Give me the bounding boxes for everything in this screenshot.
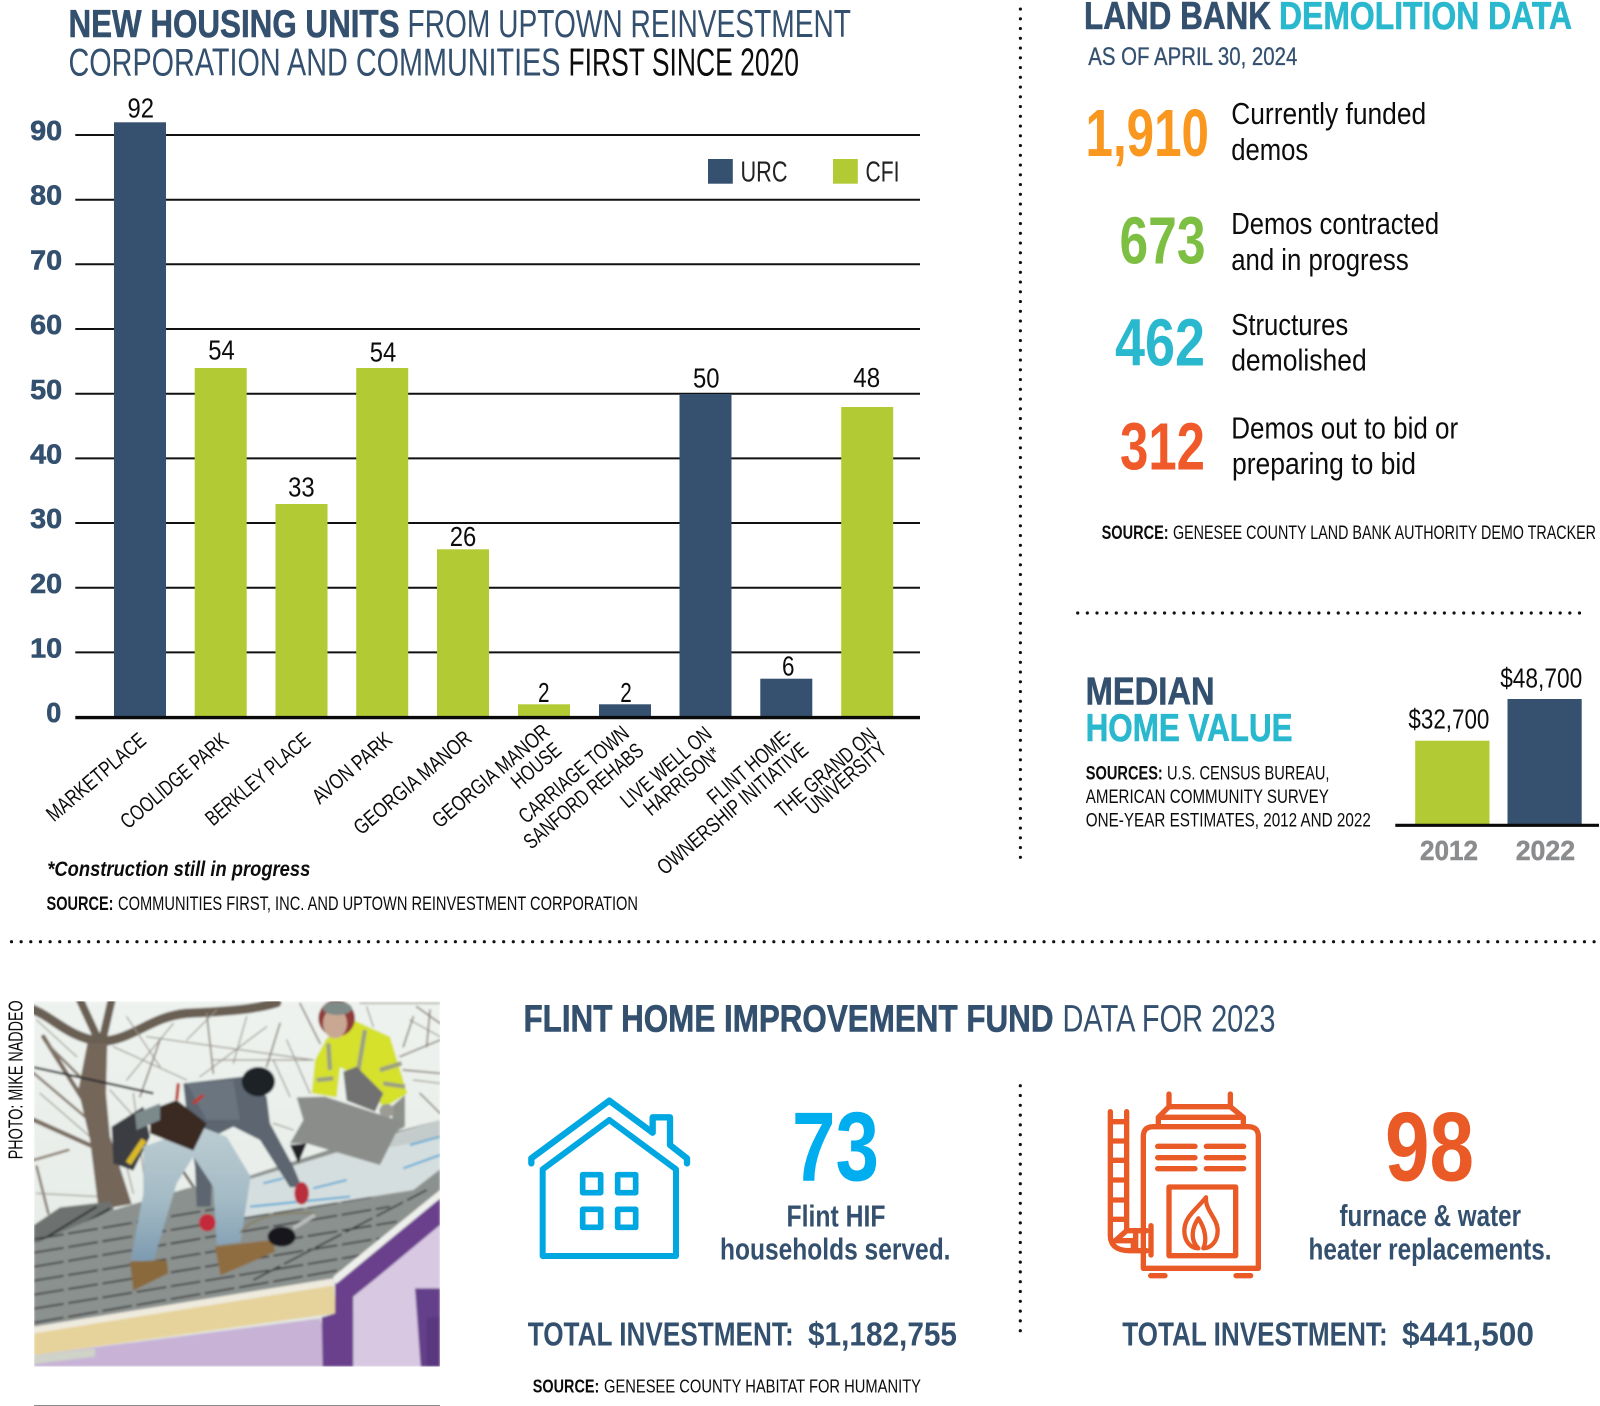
stat: 312 demos out to bid: preparing to bid — [1232, 446, 1416, 481]
bar value labels: 54 — [208, 335, 235, 366]
stat: 312 demos out to bid — [1120, 410, 1458, 485]
stat: 98 furnace and water heater replacements: furnace & water — [1340, 1198, 1521, 1233]
bar value labels: 50 — [693, 362, 720, 393]
bar chart: median value — [1395, 662, 1599, 866]
sources text: U.S. CENSUS BUREAU, — [1167, 764, 1330, 784]
y axis labels: 40 — [30, 438, 62, 469]
stat: 1,910 currently funded demos: 1,910 — [1086, 96, 1209, 171]
category labels: GEORGIA MANOR — [349, 726, 476, 840]
bar value labels — [128, 92, 880, 708]
stat: 462 structures demolished: demolished — [1231, 342, 1367, 377]
y axis labels: 0 — [46, 697, 61, 728]
sources text — [1086, 764, 1371, 832]
footnote: *Construction still in progress — [47, 858, 310, 881]
sources text: SOURCES: — [1086, 764, 1163, 784]
y axis labels: 70 — [30, 244, 62, 275]
category labels: BERKLEY PLACE — [201, 728, 315, 831]
photo: roofers working on a house — [30, 1000, 440, 1367]
total investment: 441,500: TOTAL INVESTMENT: — [1122, 1316, 1388, 1353]
heading: median home value: MEDIAN — [1086, 670, 1215, 714]
y axis labels: 80 — [30, 180, 62, 211]
total investment: 1,182,755: $1,182,755 — [808, 1316, 957, 1353]
next photo edge — [34, 1405, 440, 1406]
heading: median home value — [1086, 670, 1293, 750]
stat: 673 demos contracted: Demos contracted — [1231, 206, 1439, 241]
source line: SOURCE: — [1102, 522, 1169, 544]
title: new housing units — [68, 3, 851, 85]
category labels: GEORGIA MANOR — [427, 719, 554, 833]
bar value labels: 6 — [782, 650, 794, 682]
icon: house — [531, 1101, 687, 1256]
y axis labels: 90 — [30, 115, 62, 146]
bar value labels: 2 — [620, 677, 632, 708]
category labels: HOUSE — [506, 738, 566, 794]
source line: SOURCE: — [46, 893, 114, 915]
chart grid lines — [75, 135, 920, 652]
heading: median home value: HOME VALUE — [1086, 707, 1293, 750]
panel: median home value — [1086, 662, 1599, 866]
photo credit: PHOTO: MIKE NADDEO — [6, 1000, 28, 1159]
category labels: SANFORD REHABS — [519, 738, 648, 854]
source line — [46, 893, 638, 915]
category labels: CARRIAGE TOWN — [514, 721, 634, 828]
sources text: ONE-YEAR ESTIMATES, 2012 AND 2022 — [1086, 810, 1371, 832]
heading: land bank demolition data — [1084, 0, 1572, 38]
heading: flint home improvement fund: DATA FOR 2023 — [1062, 999, 1276, 1041]
total investment: 1,182,755: TOTAL INVESTMENT: — [528, 1316, 794, 1353]
panel: flint home improvement fund — [524, 999, 1552, 1397]
bar chart: median value: $32,700 — [1408, 703, 1489, 734]
y axis labels: 30 — [30, 503, 62, 534]
stat: 462 structures demolished: Structures — [1231, 307, 1348, 342]
stat: 1,910 currently funded demos: Currently funded — [1231, 96, 1426, 131]
legend — [708, 157, 900, 189]
sources text: AMERICAN COMMUNITY SURVEY — [1086, 787, 1329, 808]
legend: URC — [740, 157, 788, 189]
category labels: COOLIDGE PARK — [116, 728, 234, 834]
y axis labels: 60 — [30, 309, 62, 340]
category labels: OWNERSHIP INITIATIVE — [652, 738, 813, 880]
bar chart bars — [114, 122, 893, 718]
category labels: MARKETPLACE — [42, 728, 151, 826]
bar chart: median value: 2012 — [1420, 835, 1478, 866]
bar chart: median value: 2022 — [1516, 835, 1575, 866]
stat: 73 households served: Flint HIF — [786, 1199, 886, 1234]
stat: 673 demos contracted: 673 — [1120, 204, 1206, 279]
stat: 73 households served: 73 — [792, 1092, 879, 1202]
category labels: AVON PARK — [307, 727, 397, 809]
category labels: UNIVERSITY — [801, 737, 892, 820]
legend: CFI — [866, 157, 900, 189]
source line — [533, 1376, 921, 1397]
title: new housing units: FROM UPTOWN REINVESTMENT — [408, 3, 851, 46]
bar value labels: 33 — [288, 472, 315, 503]
bar value labels: 92 — [128, 92, 154, 123]
stat: 673 demos contracted — [1120, 204, 1439, 279]
bar chart: median value: $48,700 — [1500, 662, 1582, 694]
category labels: FLINT HOME- — [702, 723, 798, 810]
panel: new housing units chart — [30, 3, 920, 915]
stat: 98 furnace and water heater replacements: 98 — [1385, 1092, 1474, 1202]
title: new housing units: FIRST SINCE 2020 — [568, 42, 799, 84]
category labels: HARRISON* — [639, 742, 726, 821]
source line: COMMUNITIES FIRST, INC. AND UPTOWN REINVESTMENT CORPORATION — [118, 893, 638, 915]
category labels: LIVE WELL ON — [616, 722, 716, 813]
title: new housing units: NEW HOUSING UNITS — [68, 3, 400, 46]
bar value labels: 48 — [853, 362, 880, 393]
stat: 312 demos out to bid: 312 — [1120, 410, 1205, 485]
total investment: 441,500: $441,500 — [1402, 1316, 1534, 1353]
source line: SOURCE: — [533, 1376, 599, 1397]
stat: 1,910 currently funded demos: demos — [1231, 132, 1308, 167]
stat: 312 demos out to bid: Demos out to bid or — [1231, 410, 1458, 445]
bar value labels: 2 — [538, 677, 550, 708]
source line: GENESEE COUNTY HABITAT FOR HUMANITY — [604, 1376, 921, 1397]
stat: 73 households served: households served. — [720, 1231, 950, 1266]
y axis labels: 50 — [30, 374, 62, 405]
category labels: THE GRAND ON — [771, 723, 881, 822]
bar value labels: 26 — [450, 521, 476, 552]
y axis labels: 10 — [30, 632, 62, 663]
stat: 73 households served — [720, 1092, 950, 1266]
stat: 673 demos contracted: and in progress — [1231, 242, 1409, 277]
heading: flint home improvement fund: FLINT HOME IMPROVEMENT FUND — [524, 999, 1054, 1041]
stat: 98 furnace and water heater replacements — [1308, 1092, 1552, 1266]
date subheading: AS OF APRIL 30, 2024 — [1088, 43, 1297, 71]
panel: land bank demolition data — [1084, 0, 1596, 544]
y axis labels — [30, 115, 62, 728]
stat: 462 structures demolished: 462 — [1115, 305, 1205, 380]
stat: 462 structures demolished — [1115, 305, 1367, 380]
y axis labels: 20 — [30, 568, 62, 599]
category labels — [42, 719, 892, 880]
stat: 1,910 currently funded demos — [1086, 96, 1426, 171]
bar value labels: 54 — [370, 337, 396, 368]
icon: furnace — [1110, 1094, 1258, 1276]
title: new housing units: CORPORATION AND COMMUNITIES — [68, 42, 560, 84]
